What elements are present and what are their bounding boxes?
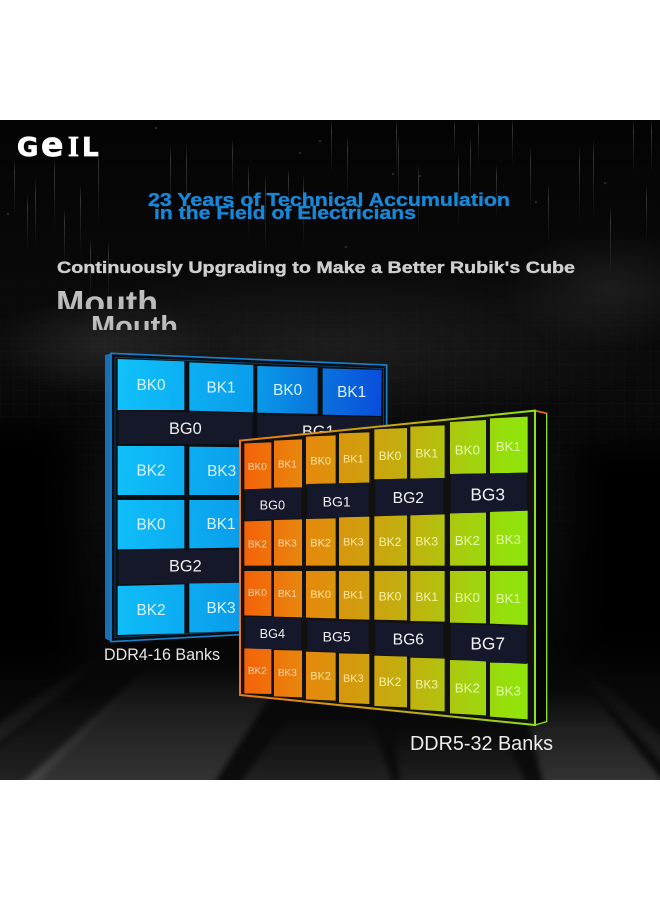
- logo: GeIL: G: [17, 133, 38, 163]
- panel: DDR4 16 banks: BK2: [137, 462, 165, 479]
- panel: DDR5 32 banks: [240, 411, 547, 725]
- panel: DDR4 16 banks: BG2: [169, 558, 202, 576]
- panel: DDR5 32 banks: BK3: [278, 538, 297, 549]
- heading: blue tagline: [148, 190, 510, 223]
- panel: DDR5 32 banks: BK1: [496, 439, 521, 454]
- panel: DDR5 32 banks: BK0: [248, 588, 267, 599]
- panel: DDR5 32 banks: BK1: [278, 589, 297, 600]
- panel: DDR4 16 banks: BG1: [302, 423, 335, 441]
- panel: DDR5 32 banks: BK3: [415, 678, 438, 692]
- panel: DDR5 32 banks: BK0: [455, 442, 480, 457]
- panel: DDR5 32 banks: BG1: [323, 494, 351, 510]
- panel: DDR5 32 banks: BK2: [379, 535, 402, 549]
- panel: DDR4 16 banks: BK0: [137, 377, 165, 394]
- panel: DDR5 32 banks: BK3: [496, 683, 521, 698]
- panel: DDR4 16 banks: BK0: [273, 382, 302, 399]
- panel: DDR5 32 banks: BG7: [470, 633, 505, 653]
- panel: DDR4 16 banks: BK3: [207, 463, 236, 480]
- panel: DDR5 32 banks: BK1: [415, 446, 438, 460]
- logo: GeIL: L: [82, 133, 99, 163]
- panel: DDR5 32 banks: BK3: [343, 537, 364, 549]
- panel: DDR4 16 banks: BK1: [207, 516, 235, 533]
- panel: DDR5 32 banks: BK0: [310, 456, 331, 468]
- heading: blue tagline: in the Field of Electricians: [154, 203, 416, 223]
- panel: DDR5 32 banks: BK2: [248, 666, 267, 677]
- panel: DDR5 32 banks: BG3: [470, 484, 505, 504]
- panel: DDR4 16 banks: BK2: [137, 602, 165, 619]
- panel: DDR4 16 banks: BK1: [337, 384, 366, 401]
- clipped Mouth text: Mouth: [56, 284, 158, 321]
- panel: DDR5 32 banks: BK0: [379, 589, 402, 603]
- panel: DDR5 32 banks: BK0: [379, 449, 402, 463]
- panel: DDR5 32 banks: BG4: [260, 627, 285, 641]
- panel: DDR4 16 banks: BK1: [207, 379, 235, 396]
- heading: blue tagline: 23 Years of Technical Accumulation: [148, 190, 510, 210]
- label: DDR4-16 Banks: DDR4-16 Banks: [104, 645, 220, 664]
- panel: DDR5 32 banks: BK3: [278, 668, 297, 679]
- logo: GeIL: I: [68, 132, 79, 163]
- panel: DDR5 32 banks: BG0: [260, 498, 285, 512]
- panel: DDR5 32 banks: BG5: [323, 629, 351, 645]
- panel: DDR5 32 banks: BK1: [278, 459, 297, 470]
- infographic canvas: [0, 120, 660, 780]
- panel: DDR5 32 banks: BK1: [496, 591, 521, 606]
- logo: GeIL: e: [41, 125, 63, 164]
- panel: DDR5 32 banks: BK2: [455, 680, 480, 695]
- clipped Mouth text: [58, 290, 176, 330]
- label: DDR5-32 Banks: DDR5-32 Banks: [410, 733, 553, 755]
- panel: DDR5 32 banks: BK2: [310, 537, 331, 549]
- background panel: [0, 120, 660, 790]
- subheading: Continuously Upgrading to Make a Better Rubik's Cube: [57, 259, 575, 277]
- panel: DDR5 32 banks: BK2: [248, 539, 267, 550]
- panel: DDR5 32 banks: BK3: [415, 534, 438, 548]
- panel: DDR5 32 banks: BG6: [393, 631, 424, 648]
- clipped Mouth text: Mouth: [91, 311, 178, 343]
- panel: DDR5 32 banks: BK0: [455, 590, 480, 605]
- panel: DDR5 32 banks: BK0: [248, 462, 267, 473]
- panel: DDR4 16 banks: BG0: [169, 420, 202, 438]
- panel: DDR4 16 banks: BK0: [137, 516, 165, 533]
- panel: DDR5 32 banks: BK1: [343, 590, 364, 602]
- panel: DDR5 32 banks: BK0: [310, 589, 331, 601]
- floor: [0, 660, 660, 790]
- panel: DDR5 32 banks: BG2: [393, 490, 424, 507]
- panel: DDR5 32 banks: BK2: [455, 533, 480, 548]
- panel: DDR5 32 banks: BK3: [343, 673, 364, 685]
- panel: DDR5 32 banks: BK1: [415, 590, 438, 604]
- panel: DDR5 32 banks: BK2: [379, 675, 402, 689]
- panel: DDR4 16 banks: [105, 353, 387, 642]
- panel: DDR5 32 banks: BK3: [496, 532, 521, 547]
- panel: DDR5 32 banks: BK1: [343, 453, 364, 465]
- panel: DDR5 32 banks: BK2: [310, 671, 331, 683]
- panel: DDR4 16 banks: BK3: [207, 600, 235, 617]
